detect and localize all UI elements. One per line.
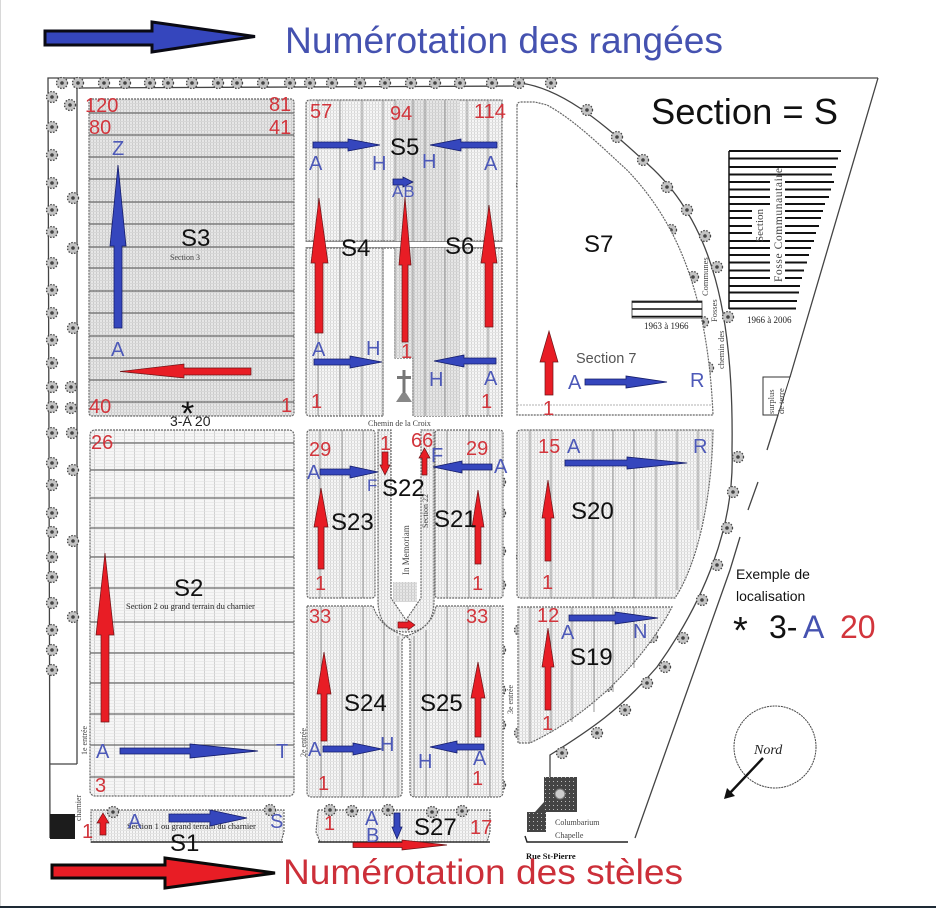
- localisation example: Exemple de: [736, 566, 810, 582]
- row letters: R: [690, 370, 704, 392]
- arrow: S5 small rows: [393, 177, 413, 187]
- arrow: S3 rows: [110, 165, 126, 328]
- localisation example: localisation: [736, 588, 805, 604]
- stele numbers: 94: [390, 103, 412, 125]
- row letters: H: [429, 369, 443, 391]
- columbarium building: Columbarium: [555, 818, 600, 827]
- section name labels: S7: [584, 231, 613, 258]
- stele numbers: 1: [82, 821, 93, 843]
- example location marker on map: 3-A 20: [170, 413, 211, 429]
- left edge strip: [0, 0, 1, 906]
- arrow: S20 rows: [565, 457, 687, 469]
- black ossuary corner block: [50, 814, 75, 839]
- common graves block: Fosse Communautaire: [773, 167, 785, 282]
- stele numbers: 1: [481, 391, 492, 413]
- row letters: T: [276, 741, 288, 763]
- entrance labels: 3e entrée: [506, 684, 515, 714]
- arrow: memorial turn: [398, 620, 415, 630]
- section name labels: S23: [331, 509, 374, 536]
- arrow: S6 steles: [481, 205, 497, 327]
- arrow: S1 rows: [169, 810, 247, 826]
- section S1: Section 1 ou grand terrain du charnier: [127, 821, 256, 831]
- row letters: H: [372, 153, 386, 175]
- section name labels: S22: [382, 475, 425, 502]
- stele numbers: 1: [324, 813, 335, 835]
- arrow: S21 steles: [472, 490, 484, 564]
- arrow: S27 rows: [392, 813, 402, 839]
- stele numbers: 114: [474, 101, 506, 123]
- common graves block: [729, 151, 841, 325]
- sections S4 S5 S6: [306, 100, 503, 416]
- row letters: S: [270, 811, 283, 833]
- row letters: A: [568, 372, 582, 394]
- arrow: S6 top rows: [430, 139, 497, 151]
- stele numbers: 57: [310, 101, 332, 123]
- arrow: S25 rows: [430, 741, 484, 753]
- row letters: [96, 138, 707, 847]
- section S22 memorial strip: [378, 430, 434, 632]
- legend heading: section: Section = S: [651, 91, 838, 132]
- street label: Rue St-Pierre: [526, 851, 576, 861]
- stele numbers: 40: [89, 396, 111, 418]
- section S22 memorial strip: Section 22: [421, 494, 430, 528]
- common graves block: 1966 à 2006: [747, 315, 792, 325]
- entrance labels: [74, 684, 515, 821]
- arrow: S7 steles: [540, 331, 558, 395]
- section S23: [307, 430, 375, 598]
- row letters: A: [484, 368, 498, 390]
- section name labels: S5: [390, 134, 419, 161]
- arrow: S25 steles: [471, 662, 485, 737]
- stele numbers: 1: [318, 773, 329, 795]
- row letters: A: [96, 741, 110, 763]
- columbarium building: Chapelle: [555, 831, 584, 840]
- cemetery map outline: [48, 78, 878, 838]
- arrow: S7 rows: [585, 376, 667, 388]
- section name labels: S25: [420, 690, 463, 717]
- example location marker on map: *: [181, 395, 194, 433]
- path label: Chemin de la Croix: Chemin de la Croix: [368, 419, 431, 428]
- row letters: A: [111, 339, 125, 361]
- row letters: H: [380, 734, 394, 756]
- arrow: S27 steles: [353, 840, 447, 850]
- stele numbers: 1: [542, 572, 553, 594]
- localisation example: A: [803, 609, 825, 645]
- row letters: F: [367, 476, 377, 495]
- legend: stele numbering arrow: [52, 858, 275, 888]
- stele numbers: 80: [89, 117, 111, 139]
- section S3: [89, 99, 294, 416]
- row letters: B: [366, 825, 379, 847]
- section S3: Section 3: [170, 253, 200, 262]
- row letters: A: [473, 748, 487, 770]
- arrow: S4 bottom rows: [314, 356, 382, 368]
- section S21: [435, 430, 503, 598]
- 1963 to 1966 graves: [632, 301, 702, 331]
- section S1: [91, 810, 284, 842]
- stele numbers: 29: [309, 439, 331, 461]
- surplus de terre box: de terre: [776, 388, 786, 414]
- icon: cross monument: [396, 370, 412, 402]
- arrow: S2 steles: [96, 553, 114, 722]
- section name labels: S24: [344, 690, 387, 717]
- row letters: A: [494, 456, 508, 478]
- arrow: S3 steles: [120, 364, 251, 378]
- arrow: S2 rows: [120, 744, 258, 758]
- arrow: S19 rows: [569, 612, 658, 624]
- section name labels: S4: [341, 235, 370, 262]
- section name labels: S27: [414, 814, 457, 841]
- arrow: S23 rows: [320, 466, 378, 478]
- section S2: Section 2 ou grand terrain du charnier: [126, 601, 255, 611]
- legend title: row numbering: Numérotation des rangées: [285, 20, 723, 61]
- row letters: H: [422, 151, 436, 173]
- stele numbers: 33: [309, 606, 331, 628]
- row letters: A: [365, 808, 379, 830]
- section S2: [90, 430, 294, 796]
- section S25: [406, 606, 503, 797]
- stele numbers: 1: [315, 573, 326, 595]
- section name labels: S21: [434, 506, 477, 533]
- stele numbers: 26: [91, 432, 113, 454]
- section name labels: S1: [170, 830, 199, 857]
- road labels: Fosses: [709, 299, 719, 322]
- section S7: [517, 102, 713, 415]
- entrance labels: 2e entrée: [299, 727, 308, 757]
- stele numbers: 1: [472, 573, 483, 595]
- columbarium building: [525, 777, 628, 842]
- row letters: A: [128, 811, 142, 833]
- row letters: H: [418, 751, 432, 773]
- section name labels: S2: [174, 575, 203, 602]
- stele numbers: 17: [470, 817, 492, 839]
- road labels: Communes: [700, 257, 710, 296]
- north compass: Nord: [753, 743, 783, 758]
- stele numbers: 1: [542, 713, 553, 735]
- road labels: chemin des: [716, 331, 726, 369]
- section S20: [517, 430, 713, 598]
- stele numbers: 1: [472, 768, 483, 790]
- surplus de terre box: [763, 377, 790, 415]
- row letters: F: [431, 445, 443, 467]
- localisation example: 3-: [769, 609, 797, 645]
- arrow: S20 steles: [542, 480, 554, 561]
- localisation example: 20: [840, 609, 876, 645]
- road labels: [700, 257, 726, 369]
- 1963 to 1966 graves: 1963 à 1966: [644, 321, 689, 331]
- entrance labels: 1e entrée: [80, 725, 89, 755]
- surplus de terre box: surplus: [766, 389, 776, 414]
- section name labels: S19: [570, 644, 613, 671]
- stele numbers: 33: [466, 606, 488, 628]
- section name labels: S20: [571, 498, 614, 525]
- section S27: [316, 810, 490, 842]
- section name labels: S6: [445, 233, 474, 260]
- trees in S1 and S27: [108, 804, 468, 818]
- north compass: [724, 706, 816, 799]
- row letters: A: [308, 739, 322, 761]
- arrow: S24 rows: [323, 743, 382, 755]
- arrow: S4 steles: [311, 198, 328, 333]
- tree rows around the map: [46, 78, 744, 790]
- row letters: Z: [112, 138, 124, 160]
- section 7 printed label: Section 7: [576, 351, 636, 367]
- example location marker on map: [170, 395, 211, 433]
- row letters: A: [312, 339, 326, 361]
- arrow: S22 up: [419, 448, 430, 475]
- stele numbers: 1: [401, 341, 412, 363]
- bottom edge strip: [0, 906, 936, 908]
- stele numbers: 81: [269, 94, 291, 116]
- row letters: H: [366, 338, 380, 360]
- stele numbers: 3: [95, 775, 106, 797]
- section S22 memorial strip: In Memoriam: [401, 525, 411, 575]
- localisation example: *: [733, 610, 748, 652]
- arrow: S6 bottom rows: [434, 355, 496, 367]
- row letters: R: [693, 436, 707, 458]
- arrow: S22 down: [380, 452, 390, 475]
- row letters: A: [484, 153, 498, 175]
- legend title: stele numbering: Numérotation des stèles: [283, 853, 683, 892]
- stele numbers: 12: [537, 605, 559, 627]
- stele numbers: 29: [466, 438, 488, 460]
- stele numbers: 1: [543, 398, 554, 420]
- row letters: A: [561, 622, 575, 644]
- stele numbers: 1: [380, 433, 391, 455]
- localisation example: [733, 566, 876, 652]
- legend: row numbering arrow: [45, 22, 255, 52]
- arrow: S5 steles: [399, 197, 411, 342]
- section S24: [307, 606, 406, 797]
- stele numbers: 1: [311, 391, 322, 413]
- row letters: N: [633, 621, 647, 643]
- stele numbers: 120: [85, 95, 118, 117]
- row letters: A: [307, 462, 321, 484]
- section name labels: [170, 134, 614, 857]
- row letters: A: [567, 436, 581, 458]
- section name labels: S3: [181, 225, 210, 252]
- arrow: S23 steles: [314, 488, 328, 569]
- row letters: A: [309, 153, 323, 175]
- arrow: S1 steles: [97, 813, 109, 835]
- stele numbers: 1: [281, 395, 292, 417]
- stele numbers: 41: [269, 117, 291, 139]
- arrow: S21 rows: [433, 461, 492, 473]
- row letters: AB: [392, 182, 415, 201]
- stele numbers: 66: [411, 430, 433, 452]
- arrow: S24 steles: [317, 652, 331, 741]
- arrow: S19 steles: [542, 628, 554, 710]
- common graves block: Section: [754, 209, 766, 242]
- stele numbers: 15: [538, 436, 560, 458]
- entrance labels: charnier: [74, 794, 83, 821]
- stele numbers: [82, 94, 560, 843]
- arrow: S4 top rows: [313, 139, 380, 151]
- section S19: [518, 607, 672, 743]
